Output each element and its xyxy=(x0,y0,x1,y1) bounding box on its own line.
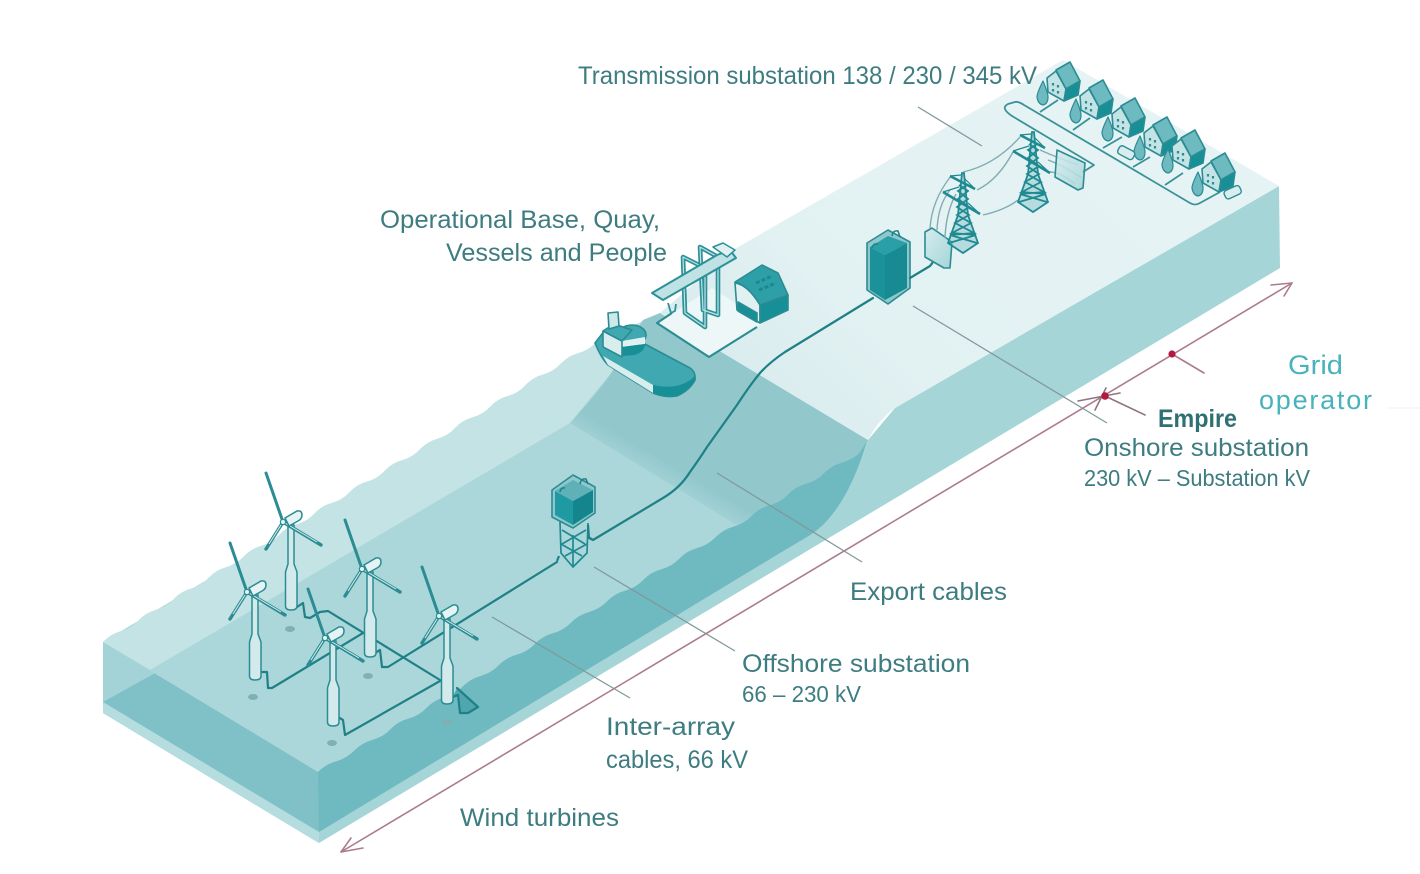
arrowhead: grid end xyxy=(1271,283,1292,296)
inter-array cables xyxy=(258,562,557,735)
label: Empire onshore substation xyxy=(1084,405,1311,491)
turbine 5 xyxy=(422,567,477,704)
house 1 xyxy=(1037,62,1080,105)
arrowhead: wind farm end xyxy=(341,838,363,852)
car 1 xyxy=(1117,145,1136,161)
label: operational base: Vessels and People xyxy=(446,239,667,267)
quay edge xyxy=(657,313,757,357)
export cable xyxy=(590,298,873,540)
onshore transformer panel xyxy=(925,228,952,268)
left face of block xyxy=(103,642,319,843)
transmission wires xyxy=(930,137,1082,238)
house 4 xyxy=(1134,117,1177,160)
warehouse xyxy=(735,265,788,323)
house 5 xyxy=(1162,130,1205,173)
sea surface xyxy=(103,345,868,776)
light water strip along far shore xyxy=(103,313,660,670)
label: grid operator: Grid xyxy=(1288,350,1343,380)
pylon 1 xyxy=(943,173,980,253)
turbine 3 xyxy=(345,520,400,657)
label: Empire onshore substation: Empire xyxy=(1158,405,1237,433)
label: wind turbines: Wind turbines xyxy=(460,804,619,832)
offshore substation xyxy=(552,475,595,567)
label: operational base xyxy=(380,206,667,267)
label: Empire onshore substation: Onshore substation xyxy=(1084,434,1309,462)
darker sea band near the coast xyxy=(570,313,868,535)
quay platform xyxy=(657,288,765,357)
label: offshore substation: 66 – 230 kV xyxy=(742,681,862,707)
crane xyxy=(652,243,736,327)
cable to transformer xyxy=(910,250,935,278)
turbine 2 xyxy=(230,543,285,680)
tick: Empire point xyxy=(1078,388,1145,415)
label: inter-array cables: Inter-array xyxy=(606,713,736,741)
wind turbines xyxy=(230,473,477,726)
label: offshore substation: Offshore substation xyxy=(742,650,970,678)
leader lines xyxy=(492,107,1107,698)
pylon 2 xyxy=(1013,132,1050,212)
distribution road xyxy=(1005,100,1220,204)
front face, deep water xyxy=(318,441,867,832)
faint divider right of grid operator xyxy=(1386,407,1420,409)
ship xyxy=(595,312,695,397)
label: transmission substation: Transmission substation 138 / 230 / 345 kV xyxy=(578,62,1037,90)
label: inter-array cables: cables, 66 kV xyxy=(606,746,748,774)
transmission substation panel xyxy=(1055,150,1085,190)
label: inter-array cables xyxy=(606,713,748,774)
houses xyxy=(1037,62,1242,200)
label: operational base: Operational Base, Quay, xyxy=(380,206,660,234)
house 3 xyxy=(1102,98,1145,141)
label: grid operator xyxy=(1259,350,1372,415)
tick: grid operator point xyxy=(1172,354,1204,373)
label: export cables: Export cables xyxy=(850,578,1007,606)
onshore substation xyxy=(867,230,910,304)
car 2 xyxy=(1223,185,1242,200)
turbine 4 xyxy=(308,589,363,726)
route arrow with grid connection points xyxy=(341,283,1292,852)
house 6 xyxy=(1192,153,1235,196)
marker: grid operator xyxy=(1168,350,1176,358)
house 2 xyxy=(1070,80,1113,123)
label: offshore substation xyxy=(742,650,970,707)
right face of block xyxy=(319,186,1280,843)
marker: Empire xyxy=(1101,392,1109,400)
turbine 1 xyxy=(266,473,321,610)
label: Empire onshore substation: 230 kV – Substation kV xyxy=(1084,465,1311,491)
turbine foundations xyxy=(248,626,452,746)
land surface xyxy=(660,60,1279,440)
label: grid operator: operator xyxy=(1259,385,1372,415)
panel: seabed block xyxy=(103,60,1280,843)
